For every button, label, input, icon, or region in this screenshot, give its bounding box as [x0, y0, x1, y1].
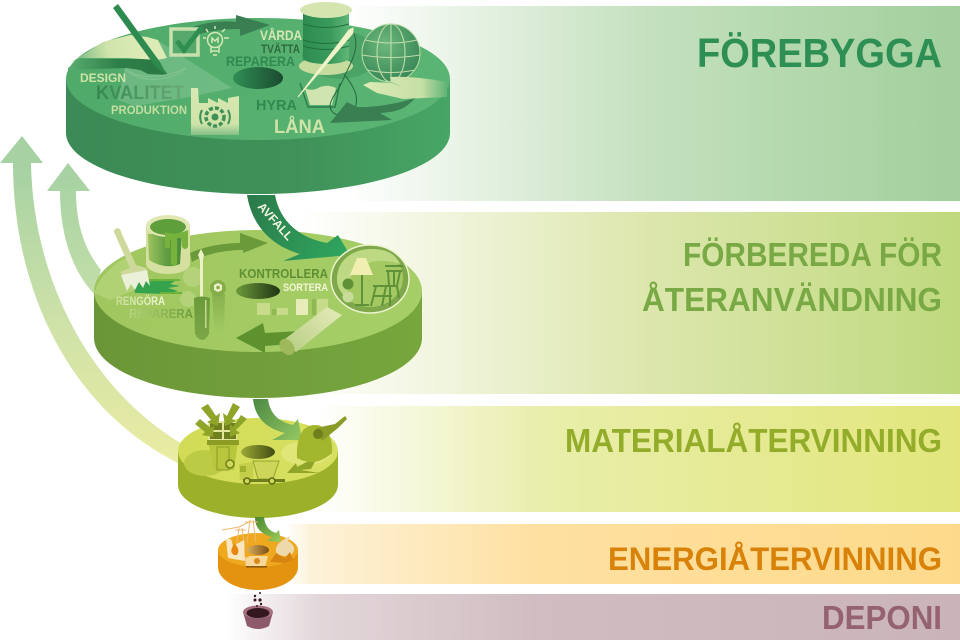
disc: Materialåtervinning	[178, 399, 347, 518]
icon: garbage truck	[239, 461, 285, 484]
icon: arrow bottom	[236, 323, 300, 353]
text: Tvätta: TVÄTTA	[261, 41, 300, 56]
disc top	[178, 418, 338, 484]
icon: power pylons	[222, 520, 258, 548]
icon: open hand	[363, 77, 447, 99]
handle	[281, 307, 342, 352]
arrow from reuse disc	[253, 399, 302, 440]
icon: light bulb	[203, 26, 229, 55]
icon: bottle dome	[297, 416, 347, 462]
text: Produktion: PRODUKTION	[111, 103, 187, 117]
icon: globe	[362, 24, 420, 82]
text: Rengöra: RENGÖRA	[116, 295, 165, 308]
icon: factory	[191, 88, 239, 135]
icon: landfill pot	[243, 592, 273, 629]
light patch right	[281, 441, 331, 465]
band: Energiåtervinning	[285, 524, 960, 584]
disc: Förbereda för återanvändning	[94, 195, 422, 398]
disc top	[66, 18, 450, 140]
icon: waste bag	[276, 536, 294, 556]
text: Kvalitet: KVALITET	[96, 83, 184, 104]
text: Vårda: VÅRDA	[260, 27, 302, 43]
arrow: reuse back to prevention	[47, 163, 101, 294]
icon: arrow right	[287, 456, 320, 473]
waste arrows	[195, 403, 247, 437]
hole	[247, 545, 269, 555]
text: Reparera: REPARERA	[129, 306, 194, 321]
lamp	[350, 258, 373, 275]
text: Design: DESIGN	[80, 71, 126, 85]
heading: Energiåtervinning: ENERGIÅTERVINNING	[608, 541, 942, 577]
hole	[241, 445, 275, 459]
icon: screwdriver	[194, 249, 210, 340]
text: Avfall: AVFALL	[255, 200, 296, 243]
faint gears	[180, 267, 203, 307]
text: Reparera: REPARERA	[226, 53, 295, 69]
icon: recycling bin	[195, 403, 247, 470]
icon: truck	[245, 556, 268, 568]
band: Deponi	[225, 594, 960, 640]
band: Förebygga	[345, 6, 960, 201]
disc: Förebygga	[66, 2, 450, 194]
band: Förbereda för återanvändning	[300, 212, 960, 394]
disc: Energiåtervinning	[218, 517, 298, 590]
light patch left	[184, 450, 226, 476]
text: Kontrollera: KONTROLLERA	[239, 267, 328, 281]
heading: Förebygga: FÖREBYGGA	[697, 30, 942, 76]
disc top	[218, 533, 298, 567]
disc side	[66, 79, 450, 194]
icon: waste factory	[226, 539, 245, 561]
heading: Materialåtervinning: MATERIALÅTERVINNING	[565, 422, 942, 459]
icon: needle	[298, 28, 353, 97]
icon: hand with pencil	[68, 4, 186, 79]
icon: washing tub	[300, 83, 340, 107]
circles	[342, 278, 354, 290]
arrow: Avfall	[247, 195, 350, 261]
pot contents	[246, 608, 270, 618]
disc side	[178, 451, 338, 518]
sorted item bars	[257, 299, 328, 315]
band: Materialåtervinning	[315, 406, 960, 512]
icon: thread	[330, 30, 357, 115]
disc top	[94, 230, 422, 352]
text: Hyra: HYRA	[256, 97, 297, 114]
icon: paintbrush	[114, 228, 182, 294]
chair	[371, 266, 403, 306]
text: Sortera: SORTERA	[283, 282, 328, 294]
hole	[233, 67, 283, 89]
light patch over disc edge	[94, 256, 135, 300]
icon: arrow top	[186, 15, 270, 37]
disc side	[94, 290, 422, 398]
icon: thread spool	[299, 2, 378, 79]
icon: arrow bottom	[330, 98, 415, 123]
text: Låna: LÅNA	[274, 117, 325, 138]
icon: arrow top	[190, 233, 268, 262]
pot body	[243, 612, 273, 629]
icon: paint can	[146, 215, 190, 274]
pot rim	[243, 606, 273, 618]
translucent paper arrow	[118, 42, 232, 106]
particles	[254, 592, 262, 607]
icon: checkbox	[171, 27, 202, 55]
arrow: material recycling back to prevention	[0, 136, 184, 464]
lens rim	[331, 245, 409, 313]
icon: magnifying glass	[276, 245, 409, 358]
disc side	[218, 550, 298, 590]
hole	[236, 283, 280, 299]
icon: wrench with nut	[210, 280, 226, 335]
arrow from material disc	[255, 517, 281, 542]
heading: återanvändning: ÅTERANVÄNDNING	[642, 281, 942, 318]
icon: arrow	[270, 552, 293, 563]
heading: Deponi: DEPONI	[822, 599, 942, 636]
lens glass	[337, 249, 403, 307]
